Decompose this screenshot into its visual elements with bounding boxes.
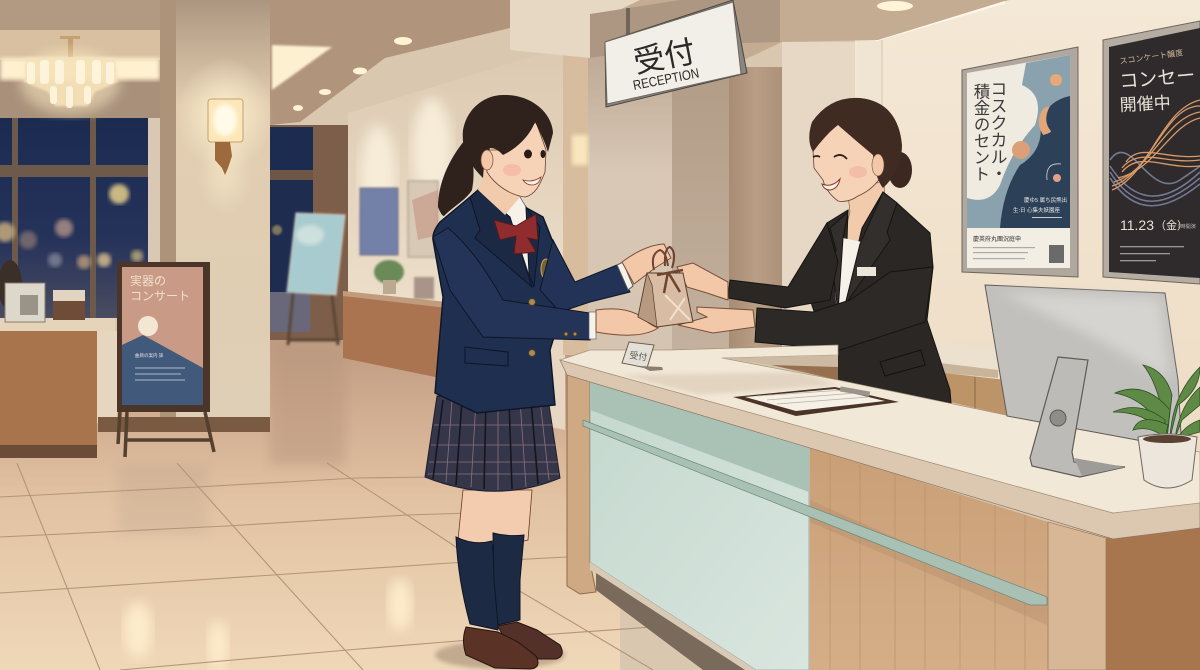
poster: concert right: スコンケート醸度	[1119, 47, 1184, 66]
hallway window and back wall	[270, 125, 348, 340]
staff left lapel	[830, 212, 848, 312]
student ear	[481, 150, 493, 170]
poster: concert right: 9時開演	[1178, 223, 1196, 230]
student ponytail	[438, 140, 474, 216]
ceiling soffit above reception	[510, 0, 1008, 67]
student upper sleeve	[540, 240, 630, 312]
easel poster	[287, 213, 345, 345]
staff ear	[872, 154, 884, 176]
glass base ledge	[590, 562, 756, 670]
pillar and reception back walls	[563, 0, 1200, 460]
reception sign	[605, 0, 747, 107]
student right shoe	[498, 622, 562, 659]
hallway sideboard	[343, 260, 450, 380]
student left shoe	[464, 627, 538, 669]
poster: concert left: 慶ゆ5 属ち民熊出	[1024, 196, 1067, 204]
reception sign: RECEPTION	[632, 65, 700, 93]
poster: concert right: 11.23	[1120, 217, 1154, 233]
student pocket	[465, 347, 508, 366]
left cabinet and display items	[0, 283, 117, 458]
gift bag	[638, 247, 693, 327]
standing concert poster: 曲目の案内 詳	[135, 352, 164, 359]
poster: concert left: 慶英府丸團況庭申	[973, 235, 1021, 243]
glass rail	[583, 420, 1047, 605]
icon: wall sconce	[208, 99, 243, 175]
staff member	[677, 98, 951, 403]
staff hair bun	[888, 152, 912, 188]
student face features	[524, 150, 532, 158]
student right sock	[493, 533, 524, 625]
student blazer body	[433, 190, 570, 413]
plant pot	[1138, 434, 1197, 488]
staff face	[813, 122, 880, 201]
student shirt cuffs	[617, 262, 633, 290]
student left sock	[456, 537, 498, 630]
reception sign: 受付	[631, 34, 698, 80]
counter well	[722, 355, 838, 380]
student lower hand	[596, 309, 658, 335]
clipboard	[733, 387, 899, 416]
student hair	[463, 95, 553, 178]
monitor stand	[1030, 357, 1125, 477]
student left lapel	[470, 190, 532, 287]
staff lower sleeve	[755, 267, 933, 350]
reception counter	[560, 342, 1200, 670]
student lower sleeve	[433, 228, 590, 340]
hallway wall with pictures	[348, 47, 565, 430]
wood post	[1048, 522, 1106, 670]
staff neck	[843, 180, 885, 244]
left window with night city	[0, 118, 160, 318]
monitor stand foot	[1074, 458, 1125, 476]
standing concert poster: 実器の	[130, 274, 166, 288]
mini sign	[622, 342, 654, 368]
staff face features	[813, 155, 847, 159]
staff hair	[809, 98, 902, 188]
staff jacket torso	[800, 192, 951, 403]
student plaid skirt	[425, 396, 560, 491]
left column	[98, 0, 273, 432]
poster: concert left	[962, 47, 1078, 277]
glass panel	[590, 382, 809, 670]
wood panel	[810, 447, 1048, 670]
poster: concert right: （金）	[1155, 219, 1188, 232]
student bow	[494, 214, 538, 254]
staff pocket	[880, 350, 925, 376]
reception counter: 受付	[629, 349, 648, 362]
student right lapel	[526, 207, 540, 287]
counter top surface	[560, 345, 1200, 513]
student shirt	[478, 178, 530, 278]
poster: concert right: 開催中	[1119, 93, 1171, 115]
far counter behind staff	[780, 342, 1006, 415]
poster: concert right	[1103, 21, 1200, 284]
computer monitor	[985, 285, 1182, 477]
student figure	[425, 95, 671, 669]
counter top front edge	[560, 360, 1200, 539]
right wood block	[1106, 524, 1200, 670]
floor with tile lines	[0, 335, 680, 670]
standing concert poster: コンサート	[130, 289, 190, 303]
poster: concert left: 積金のセント	[971, 83, 990, 182]
student face	[487, 122, 546, 197]
counter shadow	[620, 372, 838, 395]
staff lower hand	[678, 307, 755, 333]
staff upper sleeve	[728, 223, 838, 308]
standing concert poster	[117, 262, 214, 457]
student upper hand	[622, 244, 671, 284]
student lower cuff	[589, 312, 596, 339]
poster: concert left: 生:日 心集夫妖園座	[1013, 206, 1061, 214]
poster: concert left: コスクカル・	[988, 80, 1006, 182]
student buttons	[528, 298, 577, 356]
counter post	[567, 373, 596, 594]
potted plant	[1113, 365, 1200, 488]
student legs	[458, 490, 532, 548]
student emblem	[541, 259, 551, 279]
staff right lapel	[845, 192, 897, 305]
staff name tag	[857, 267, 876, 276]
staff blouse	[835, 238, 862, 312]
student neck	[478, 168, 520, 215]
staff upper hand	[677, 263, 728, 300]
chandelier	[20, 36, 120, 114]
